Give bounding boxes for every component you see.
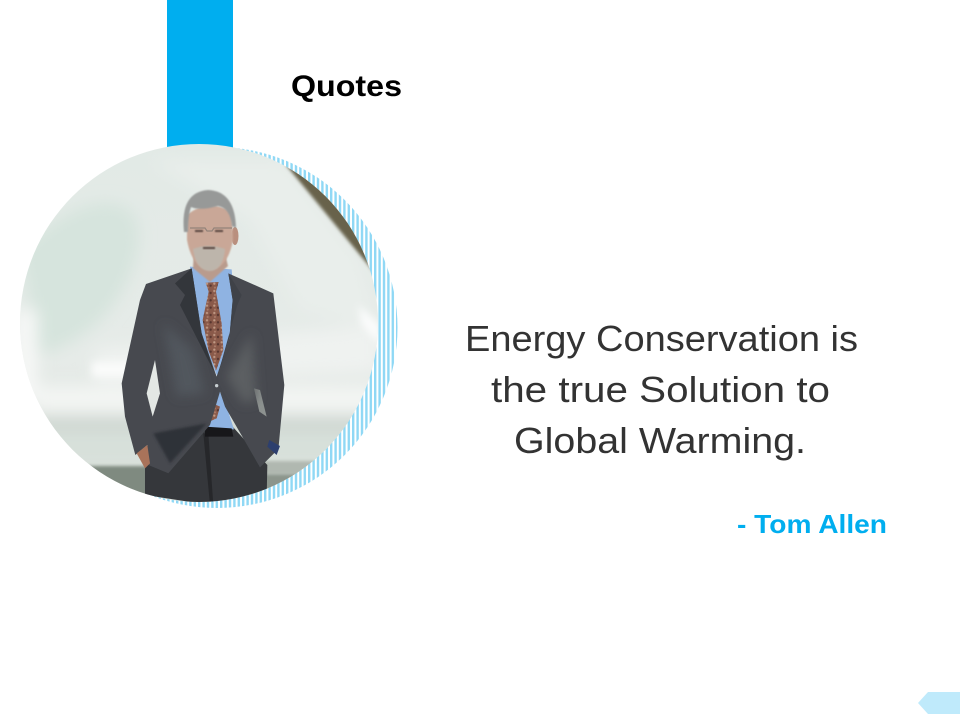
lower shirt (208, 392, 234, 430)
belt (205, 427, 233, 437)
quote text: Global Warming. (514, 420, 806, 461)
quote text: Energy Conservation is (465, 318, 858, 359)
beard (193, 246, 225, 271)
glasses (190, 228, 232, 231)
jacket shadow (153, 423, 207, 463)
shirt (190, 266, 232, 376)
right lapel (219, 274, 233, 370)
body (122, 267, 284, 505)
quote attribution: - Tom Allen (737, 509, 887, 539)
floor left (89, 464, 150, 496)
page marker tab (918, 692, 960, 714)
jacket (122, 268, 284, 473)
hair (184, 190, 236, 232)
quote text: the true Solution to (491, 369, 830, 410)
button (215, 384, 218, 387)
portrait photo (15, 140, 390, 510)
man (122, 190, 284, 505)
eyes and mouth (195, 231, 223, 248)
trousers (145, 427, 268, 502)
tie (203, 282, 223, 371)
title: Quotes (291, 70, 402, 103)
accent bar (167, 0, 233, 150)
neck (192, 258, 228, 282)
arm gap left (147, 360, 160, 417)
jacket highlight (227, 333, 257, 403)
floor right (265, 460, 314, 474)
quote text (465, 318, 858, 461)
ear (232, 227, 238, 245)
hand (137, 445, 150, 468)
right cuff (267, 440, 280, 455)
lower tie (211, 405, 220, 421)
face (187, 206, 233, 270)
arm gap right (254, 388, 267, 417)
striped circle (36, 147, 398, 508)
dark beam (284, 166, 370, 271)
left lapel (175, 268, 214, 372)
